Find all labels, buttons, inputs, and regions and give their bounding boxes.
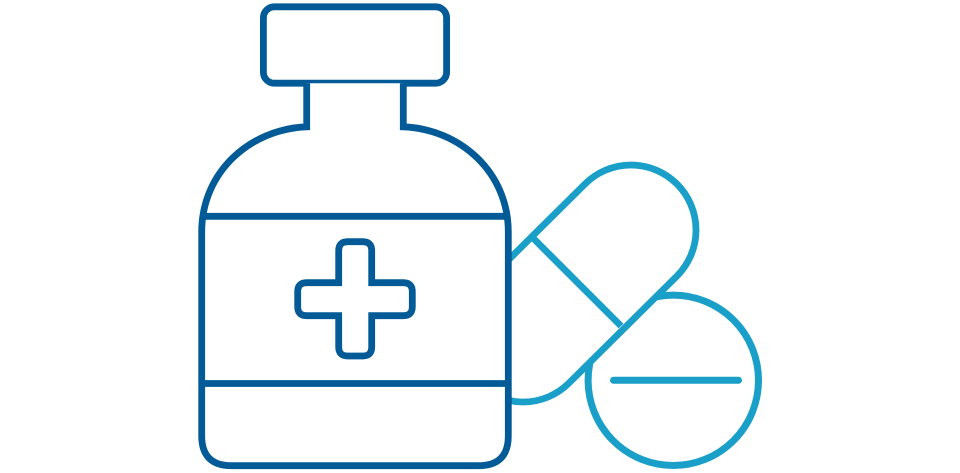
bottle cap [263,7,447,83]
bottle body [202,83,508,466]
icon: capsule [458,165,696,402]
icon: round tablet [588,295,758,465]
icon: medicine bottle [199,7,511,466]
label lines [199,216,511,384]
plus sign [298,242,412,356]
